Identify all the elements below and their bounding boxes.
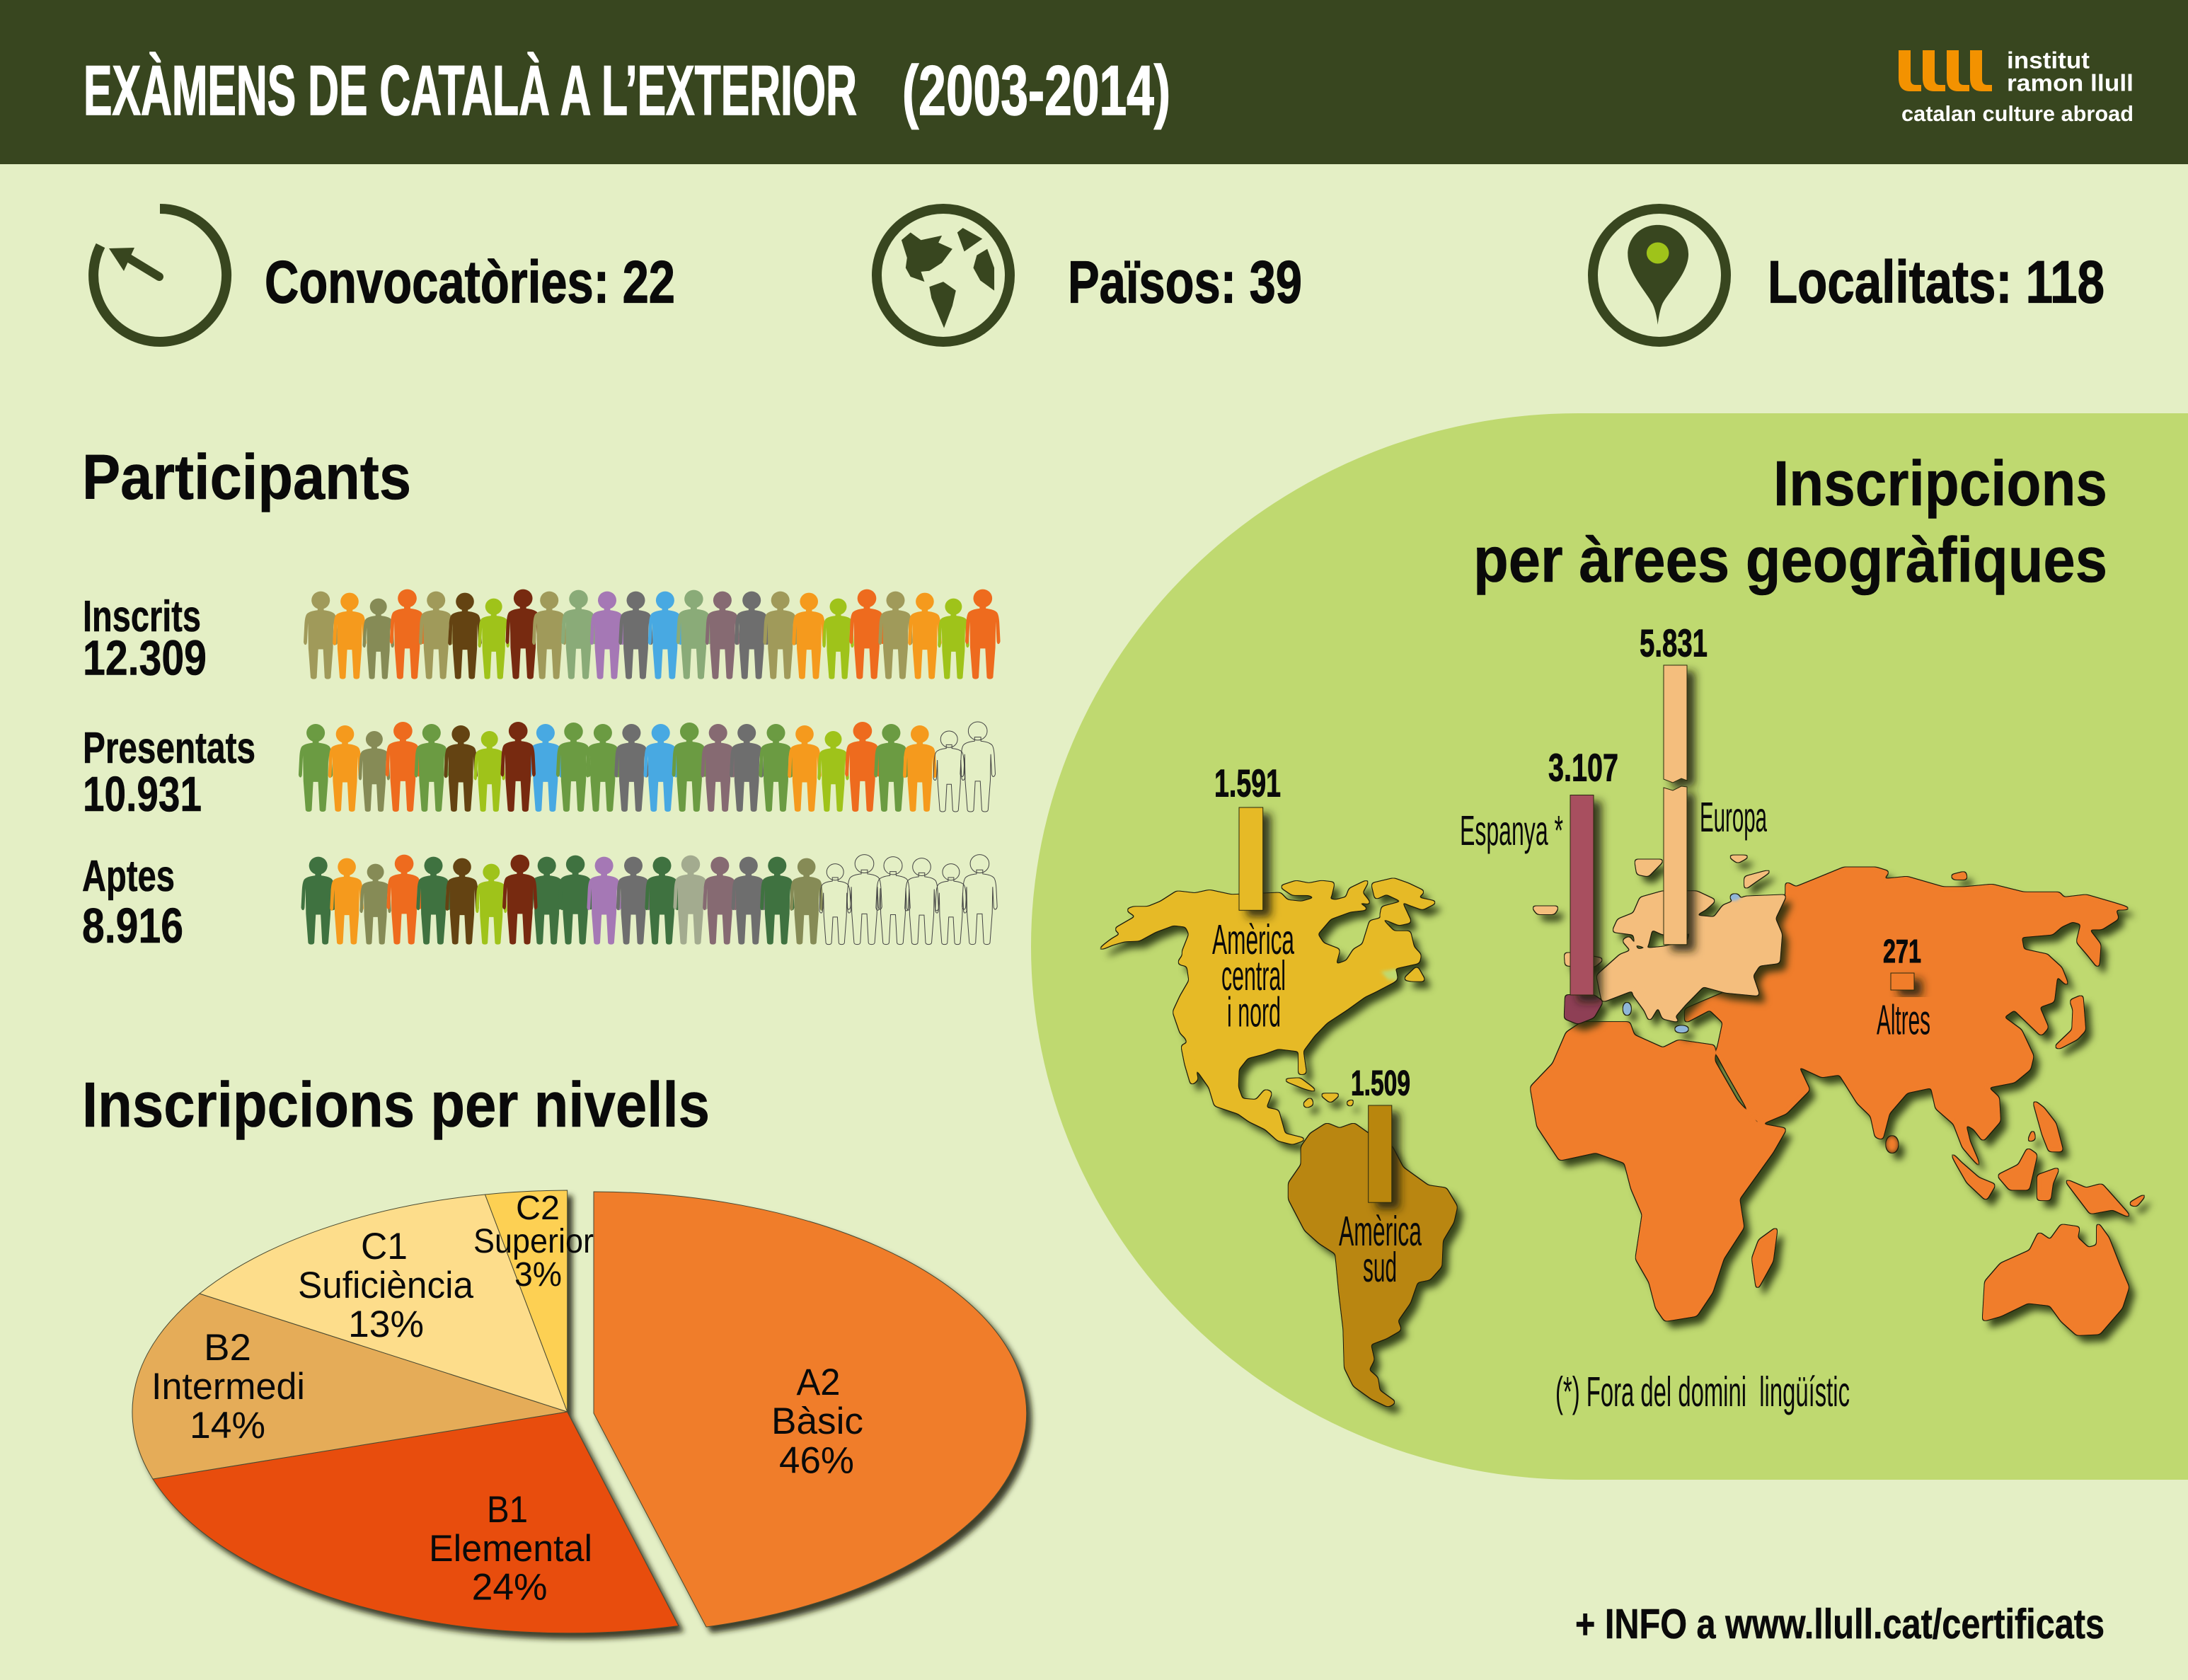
label: America central i nord: i nord: [1227, 989, 1281, 1036]
continent: Africa, Asia and Oceania: [1531, 868, 2148, 1335]
icon: map pin: [1593, 209, 1726, 342]
label: A2: 46%: [779, 1439, 854, 1482]
value: America central i nord: 1.591: [1214, 761, 1281, 805]
row: aptes: 8.916: [82, 898, 183, 953]
value: Espanya: 3.107: [1548, 746, 1618, 790]
pie slice: A2: [594, 1192, 1027, 1627]
label: B2: [151, 1327, 305, 1446]
bar: Europa (broken): [1664, 665, 1687, 945]
heading: inscripcions per arees: Inscripcions: [1773, 449, 2107, 519]
footnote: (*) Fora del domini lingüístic: [1555, 1369, 1850, 1415]
label: America sud: [1339, 1208, 1422, 1291]
bar: America sud: [1369, 1105, 1392, 1202]
heading: participants: Participants: [82, 442, 411, 513]
icon: globe: [877, 209, 1010, 342]
continent: South America: [1289, 1124, 1457, 1406]
row: aptes: [82, 852, 997, 953]
label: America sud: Amèrica: [1339, 1208, 1422, 1255]
label: C1: 13%: [348, 1304, 424, 1345]
stat: convocatories: Convocatòries: 22: [265, 249, 675, 316]
row: aptes: Aptes: [82, 852, 175, 901]
label: C1: Suficiència: [298, 1265, 473, 1306]
label: A2: Bàsic: [771, 1400, 863, 1442]
label: B1: 24%: [472, 1567, 548, 1609]
people: presentats: [299, 722, 995, 812]
row: presentats: [83, 722, 995, 822]
label: America central i nord: Amèrica: [1212, 916, 1294, 963]
stat: paisos: [877, 209, 1302, 342]
logo: institut ramon llull: ramon llull: [2007, 69, 2134, 96]
value: Altres: 271: [1883, 933, 1921, 970]
continent: North America: [1095, 879, 1437, 1144]
label: Altres: Altres: [1877, 997, 1930, 1044]
row: inscrits: 12.309: [83, 631, 207, 686]
panel: geographic areas: [1031, 413, 2188, 1480]
stat: localitats: [1593, 209, 2104, 342]
value: Europa: 5.831: [1640, 621, 1708, 665]
people: aptes: [301, 855, 997, 945]
stat: localitats: Localitats: 118: [1768, 249, 2104, 316]
label: America sud: sud: [1363, 1244, 1397, 1291]
stat: paisos: Països: 39: [1068, 249, 1302, 316]
header band: [0, 0, 2188, 164]
label: C1: [298, 1226, 473, 1345]
label: A2: [771, 1362, 863, 1482]
people: inscrits: [304, 589, 1001, 679]
label: B2: B2: [204, 1327, 251, 1369]
continent: Europe: [1532, 856, 1786, 1032]
row: presentats: 10.931: [83, 766, 202, 822]
row: inscrits: Inscrits: [83, 592, 201, 641]
label: A2: A2: [797, 1362, 841, 1403]
label: C2: 3%: [514, 1256, 562, 1294]
title: EXÀMENS DE CATALÀ A L’EXTERIOR: [84, 51, 857, 130]
label: B1: B1: [487, 1489, 528, 1531]
heading: inscripcions per nivells: Inscripcions per nivells: [82, 1070, 710, 1141]
bar: Espanya: [1570, 795, 1594, 995]
value: America sud: 1.509: [1351, 1063, 1410, 1103]
logo: institut ramon llull: institut: [2007, 47, 2090, 74]
label: C2: C2: [516, 1190, 560, 1227]
heading: inscripcions per arees: per àrees geogràfiques: [1473, 525, 2107, 596]
pie chart: levels: [132, 1190, 1027, 1633]
title years: (2003-2014): [902, 51, 1170, 130]
logo: institut ramon llull: [1899, 47, 2134, 126]
row: presentats: Presentats: [83, 724, 255, 773]
label: B2: 14%: [190, 1405, 265, 1446]
map: world: Europa: [1700, 794, 1767, 841]
label: America central i nord: central: [1221, 953, 1286, 999]
heading: inscripcions per arees: [1473, 449, 2107, 596]
label: B2: Intermedi: [151, 1366, 305, 1408]
region: Iberia: [1565, 996, 1603, 1023]
row: inscrits: [83, 589, 1001, 686]
label: B1: [429, 1489, 592, 1609]
stat: convocatories: [93, 209, 675, 342]
label: B1: Elemental: [429, 1528, 592, 1570]
label: C2: [473, 1190, 594, 1294]
label: Espanya: Espanya *: [1460, 807, 1563, 854]
label: C1: C1: [361, 1226, 408, 1267]
logo: institut ramon llull: catalan culture abroad: [1901, 101, 2134, 126]
label: C2: Superior: [473, 1223, 594, 1260]
icon: clock: [93, 209, 226, 342]
pie slices: B1, B2, C1, C2: [132, 1190, 679, 1633]
bar: Altres: [1891, 973, 1914, 990]
map: world: [1095, 621, 2148, 1415]
bar: America central i nord: [1239, 807, 1263, 910]
label: America central i nord: [1212, 916, 1294, 1036]
